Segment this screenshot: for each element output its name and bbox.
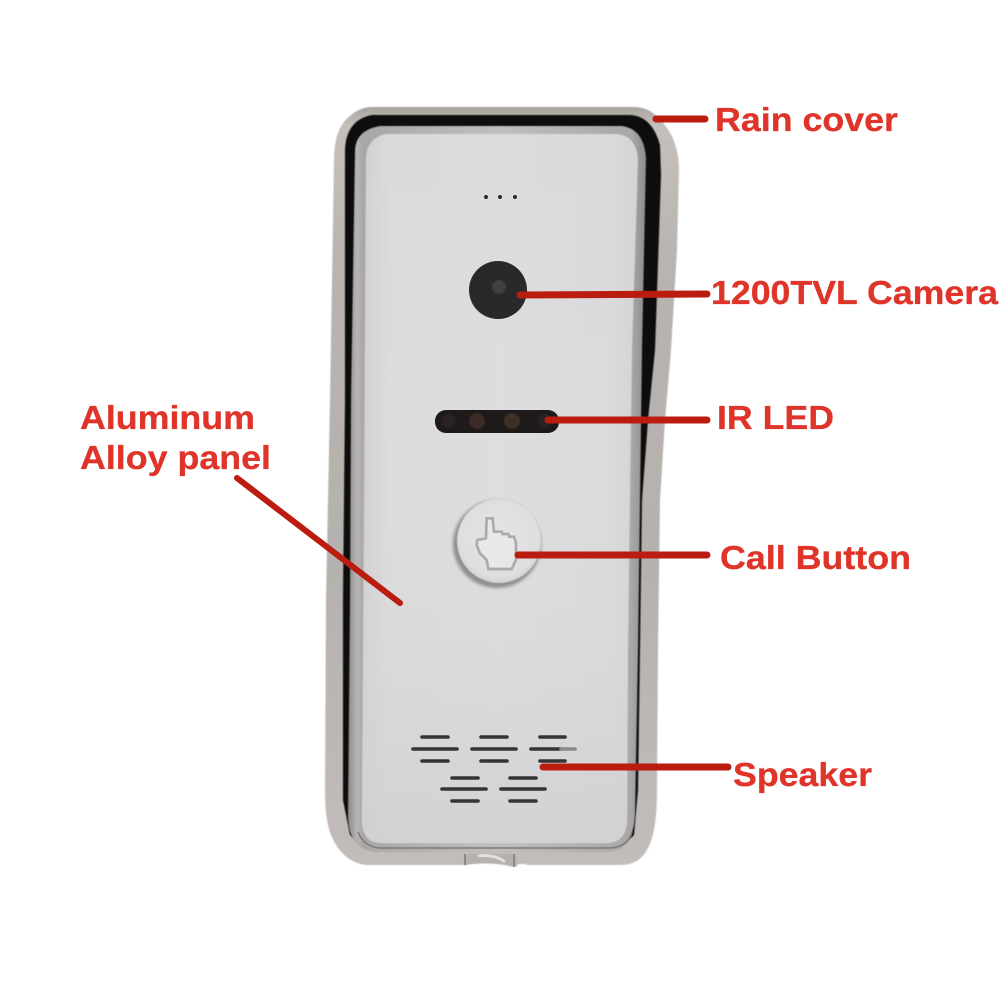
bottom rim line — [358, 832, 632, 848]
speaker slots — [413, 737, 575, 801]
bottom tab — [464, 854, 517, 867]
black gasket — [343, 115, 661, 848]
doorbell device — [325, 107, 679, 867]
pointer line: call button — [518, 552, 707, 558]
call button — [453, 499, 541, 588]
pointer line: camera — [520, 294, 707, 295]
faceplate shading — [362, 134, 638, 843]
rain cover — [325, 107, 679, 867]
pointer line: rain cover — [656, 116, 705, 122]
camera lens — [469, 261, 527, 319]
indicator dots — [484, 195, 517, 199]
label: call button: Call Button — [720, 539, 911, 576]
IR LED bar — [435, 410, 559, 433]
icon: pointing hand — [477, 518, 516, 569]
label: aluminum alloy panel: Alloy panel — [80, 439, 271, 476]
label: speaker: Speaker — [733, 756, 872, 793]
label: aluminum alloy panel — [80, 399, 271, 476]
label: IR LED: IR LED — [717, 399, 834, 436]
faceplate rim — [348, 126, 646, 852]
pointer line: IR LED — [548, 416, 707, 424]
pointer line: aluminum alloy panel — [237, 478, 400, 603]
pointer line: speaker — [543, 764, 728, 770]
label: camera: 1200TVL Camera — [711, 274, 999, 311]
label: rain cover: Rain cover — [715, 101, 898, 138]
label: aluminum alloy panel: Aluminum — [80, 399, 255, 436]
faceplate surface — [362, 134, 638, 843]
